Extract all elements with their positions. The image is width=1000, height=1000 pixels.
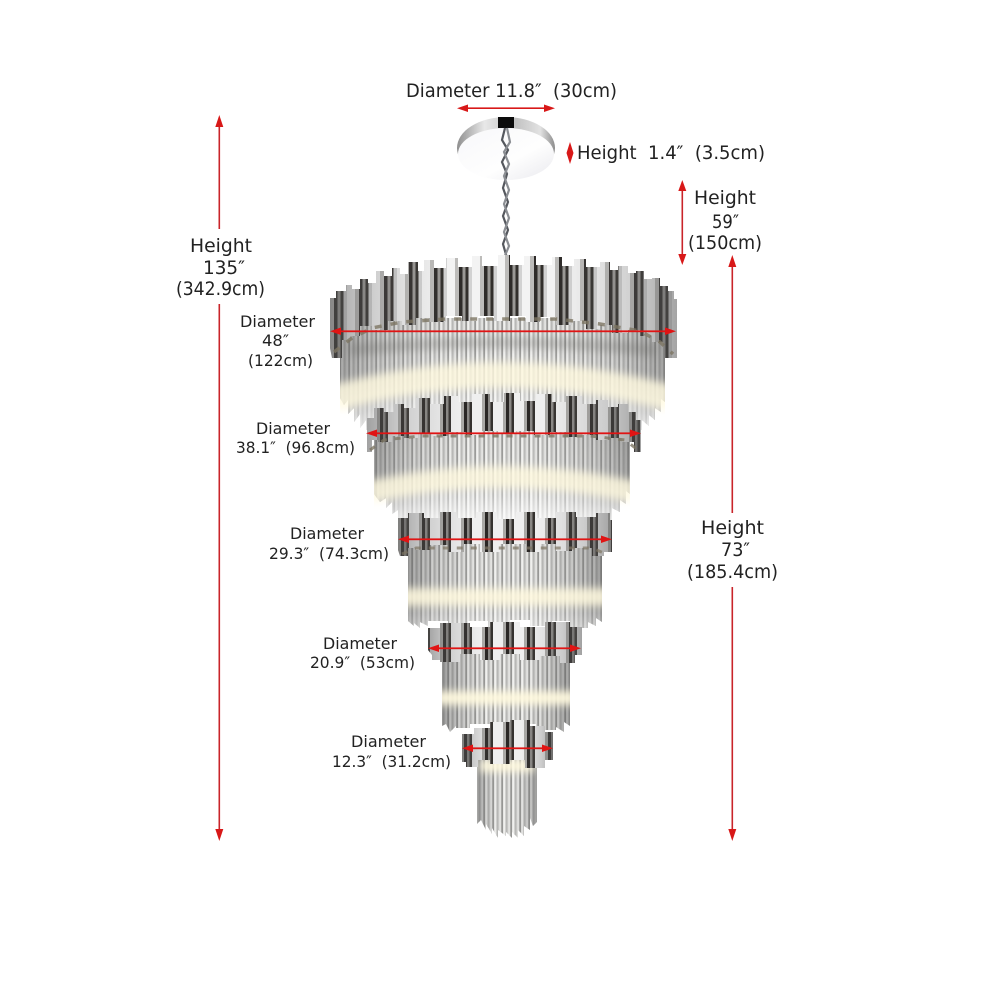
label: total height: Height xyxy=(190,235,252,257)
label: tier 2 diameter: 38.1″ (96.8cm) xyxy=(236,438,355,457)
label: tier 1 diameter: (122cm) xyxy=(248,351,313,370)
label: total height xyxy=(176,235,265,300)
label: tier 5 diameter: Diameter xyxy=(351,732,426,751)
arrow: tier 1 diameter xyxy=(330,328,676,335)
arrow: tier 3 diameter xyxy=(398,536,612,543)
label: total height: (342.9cm) xyxy=(176,278,265,300)
tier 5 crystal rods xyxy=(477,760,537,838)
label: tier 4 diameter: Diameter xyxy=(323,634,397,653)
label: body height: 73″ xyxy=(721,539,750,561)
tier 2 crystal rods xyxy=(370,430,634,520)
tier 5 chrome band xyxy=(462,720,553,768)
label: tier 4 diameter: 20.9″ (53cm) xyxy=(310,653,415,672)
label: tier 1 diameter xyxy=(240,312,315,370)
label: tier 1 diameter: 48″ xyxy=(262,331,289,350)
label: tier 2 diameter xyxy=(236,419,355,457)
label: tier 3 diameter xyxy=(269,524,389,563)
label: chain height: (150cm) xyxy=(688,232,762,254)
arrow: tier 4 diameter xyxy=(428,644,581,652)
tier 4 chrome band xyxy=(428,622,582,663)
arrow: canopy diameter xyxy=(457,104,555,112)
tier 3 crystal rods xyxy=(408,544,602,628)
tier 1 chrome band xyxy=(330,255,677,358)
label: canopy diameter: Diameter 11.8″ (30cm) xyxy=(406,80,617,102)
arrow: chain height xyxy=(678,180,686,265)
label: tier 2 diameter: Diameter xyxy=(256,419,330,438)
label: tier 5 diameter xyxy=(332,732,451,771)
label: body height xyxy=(687,517,778,583)
label: tier 3 diameter: Diameter xyxy=(290,524,364,543)
arrow: total height xyxy=(215,115,223,841)
hanging chain xyxy=(502,128,510,258)
label: tier 1 diameter: Diameter xyxy=(240,312,315,331)
label: tier 4 diameter xyxy=(310,634,415,672)
label: tier 5 diameter: 12.3″ (31.2cm) xyxy=(332,752,451,771)
ceiling canopy xyxy=(457,117,555,180)
label: total height: 135″ xyxy=(203,257,245,279)
label: body height: (185.4cm) xyxy=(687,561,778,583)
tier 3 chrome band xyxy=(398,512,612,556)
arrow: canopy height xyxy=(566,142,574,164)
tier 4 crystal rods xyxy=(442,654,570,732)
tier 2 chrome band xyxy=(367,393,641,452)
label: body height: Height xyxy=(701,517,764,539)
arrow: tier 5 diameter xyxy=(462,744,553,752)
label: chain height: 59″ xyxy=(712,211,739,233)
arrow: tier 2 diameter xyxy=(366,430,641,437)
arrow: chandelier body height xyxy=(728,255,736,841)
tier 1 crystal rods xyxy=(335,318,670,430)
label: tier 3 diameter: 29.3″ (74.3cm) xyxy=(269,544,389,563)
label: chain height xyxy=(688,187,762,254)
label: chain height: Height xyxy=(694,187,756,209)
chandelier xyxy=(330,117,677,838)
label: canopy height: Height 1.4″ (3.5cm) xyxy=(577,142,765,164)
